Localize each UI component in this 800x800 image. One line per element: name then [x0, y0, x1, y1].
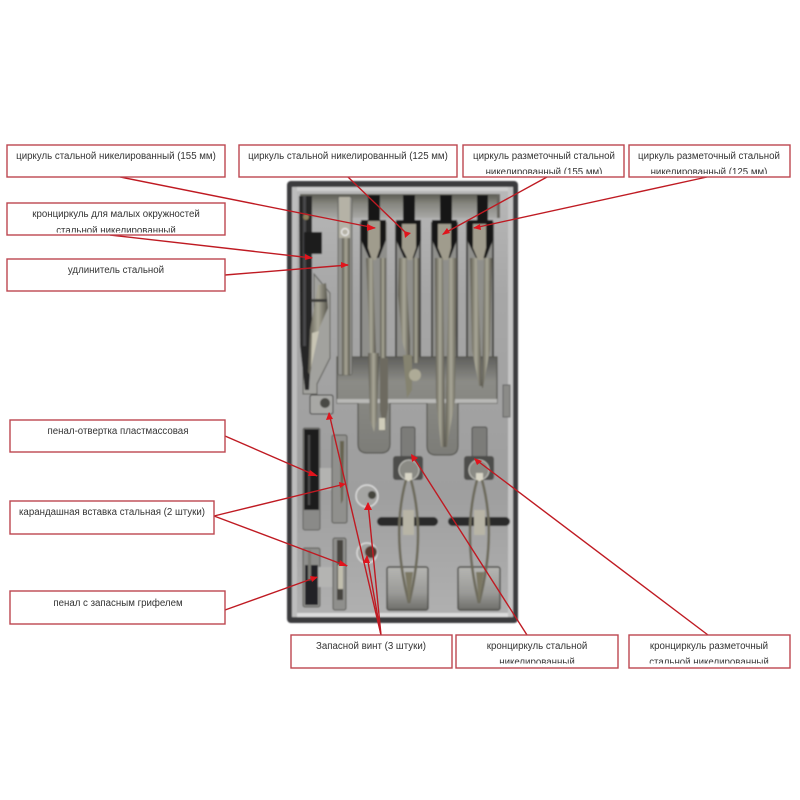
photo: drawing set tray: [287, 181, 518, 623]
upper recess: [300, 194, 500, 218]
label: pencil insert: карандашная вставка стальная (2 штуки): [19, 507, 205, 518]
label: spare lead case: пенал с запасным грифелем: [53, 598, 183, 609]
label: plastic screwdriver case: [10, 420, 225, 452]
vertical tool channels: [360, 222, 494, 357]
left dark tool slot: [303, 274, 330, 394]
pencil insert slot lower: [333, 538, 346, 610]
label: compass 155 mm: циркуль стальной никелированный (155 мм): [16, 151, 216, 162]
label: compass 155 mm: [7, 145, 225, 177]
plastic screwdriver case: [303, 428, 333, 530]
leader lines: [110, 177, 708, 635]
extension bar slot: [338, 197, 352, 375]
label: marking compass 125 mm: никелированный (125 мм): [651, 167, 767, 178]
extension bar: [339, 197, 350, 375]
pencil-lead case: [303, 548, 337, 607]
label: spare screw: [291, 635, 452, 668]
divider 2: [458, 427, 500, 610]
label: pencil insert: [10, 501, 214, 534]
lower cross well: [337, 357, 497, 455]
label: compass 125 mm: циркуль стальной никелированный (125 мм): [248, 151, 448, 162]
label: marking divider: стальной никелированный: [649, 657, 769, 668]
label: small-circle divider: [7, 203, 225, 236]
label: small-circle divider: стальной никелированный: [56, 226, 176, 236]
label: marking compass 125 mm: циркуль разметочный стальной: [638, 151, 780, 162]
label: plastic screwdriver case: пенал-отвертка пластмассовая: [48, 426, 188, 437]
compass 2: [396, 195, 421, 398]
spare screw 2: [357, 543, 377, 563]
label: divider: [456, 635, 618, 668]
divider 1: [387, 427, 428, 610]
label: steel extension: удлинитель стальной: [68, 265, 164, 276]
arrowheads: [305, 224, 482, 582]
compass 1: [361, 195, 388, 432]
tray frame: [287, 181, 518, 623]
small-circle divider: [308, 283, 328, 375]
label: marking divider: [629, 635, 790, 668]
label: divider: кронциркуль стальной: [487, 641, 587, 652]
label: spare lead case: [10, 591, 225, 624]
label: divider: никелированный: [499, 657, 575, 668]
label: marking compass 155 mm: циркуль разметочный стальной: [473, 151, 615, 162]
label: marking compass 155 mm: [463, 145, 624, 178]
dark horizontal slots: [377, 517, 510, 526]
label: small-circle divider: кронциркуль для малых окружностей: [32, 209, 200, 220]
label: steel extension: [7, 259, 225, 291]
side notch: [503, 385, 510, 417]
label: spare screw: Запасной винт (3 штуки): [316, 641, 426, 652]
pencil insert slot upper: [332, 435, 347, 523]
small screw box: [310, 395, 333, 414]
compass 4: [467, 195, 493, 388]
label: marking compass 125 mm: [629, 145, 790, 178]
label: compass 125 mm: [239, 145, 457, 177]
tray inner surface: [292, 187, 513, 617]
compass 3: [432, 195, 457, 447]
spare screw 1: [356, 485, 378, 507]
label: marking divider: кронциркуль разметочный: [650, 641, 768, 652]
label: marking compass 155 mm: никелированный (155 мм): [486, 167, 602, 178]
